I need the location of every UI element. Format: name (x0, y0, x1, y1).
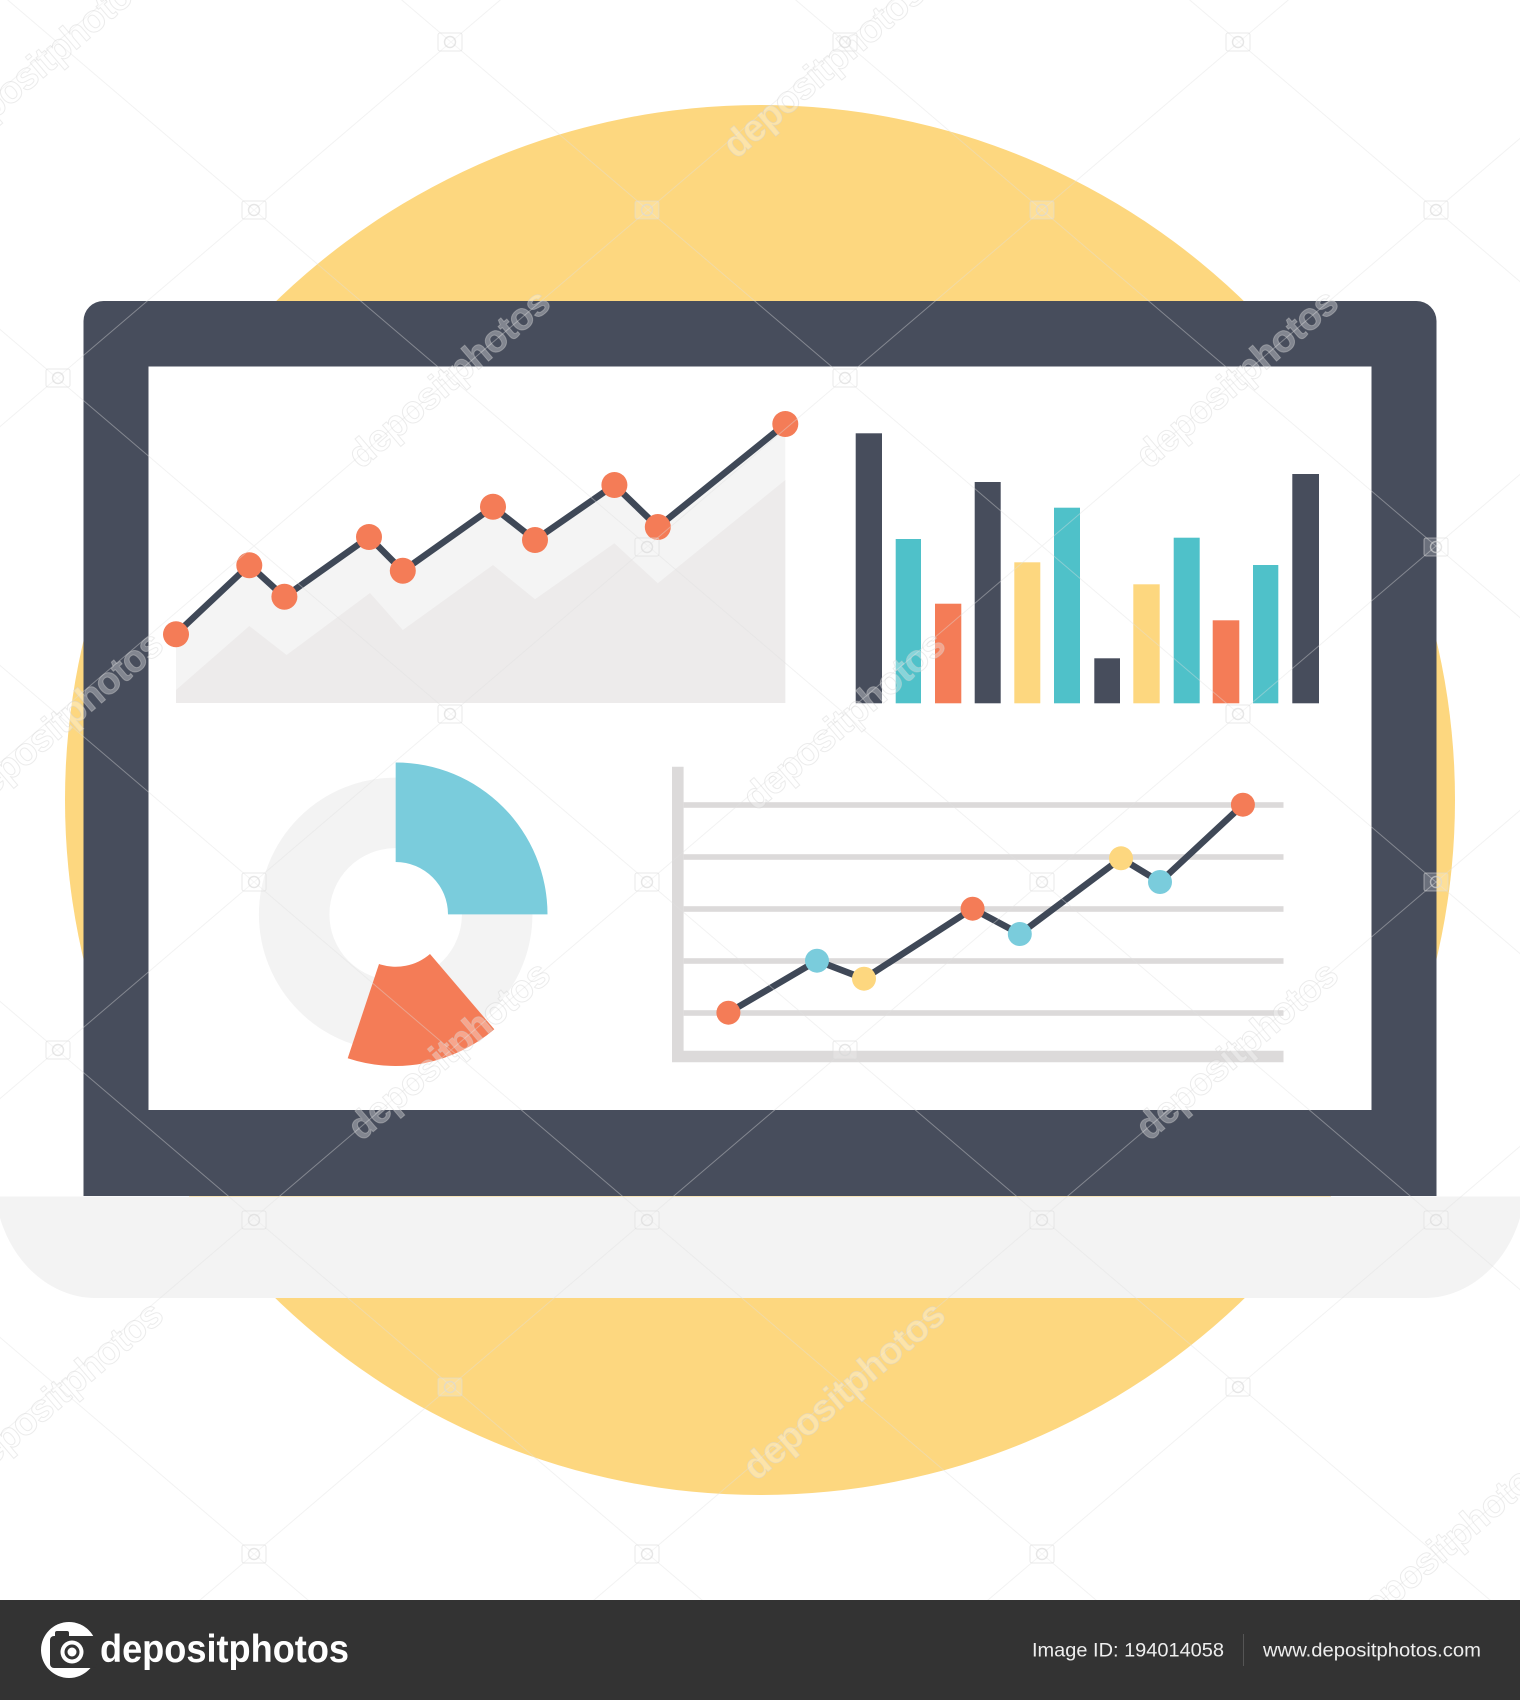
bar chart (856, 433, 1319, 703)
dark area (176, 480, 785, 703)
grid line chart (672, 767, 1284, 1062)
watermark pattern: depositphotos (735, 623, 954, 819)
laptop base (0, 1196, 1520, 1298)
teal segment (396, 762, 548, 914)
watermark pattern: depositphotos (1128, 281, 1347, 477)
footer bar (0, 1600, 1520, 1700)
donut ring (294, 813, 497, 1016)
data points (716, 793, 1255, 1025)
area line chart (163, 411, 798, 703)
grid lines (684, 802, 1284, 1016)
chart axes (672, 767, 1284, 1062)
watermark pattern: depositphotos (340, 281, 559, 477)
image id: Image ID: 194014058 (1032, 1640, 1224, 1662)
background circle (65, 105, 1455, 1495)
data points (163, 411, 798, 647)
trend line (728, 805, 1243, 1013)
watermark pattern: depositphotos (735, 1293, 954, 1489)
light area (176, 424, 785, 703)
donut chart (294, 762, 548, 1066)
trend line (176, 424, 785, 634)
logo wordmark: depositphotos (100, 1628, 349, 1671)
footer divider (1243, 1634, 1244, 1666)
orange segment (348, 954, 494, 1066)
website: www.depositphotos.com (1262, 1640, 1481, 1662)
screen display (148, 366, 1372, 1110)
watermark pattern: depositphotos (340, 953, 559, 1149)
laptop screen frame (84, 301, 1436, 1196)
watermark pattern: depositphotos (1128, 953, 1347, 1149)
icon: camera logo (41, 1622, 97, 1678)
